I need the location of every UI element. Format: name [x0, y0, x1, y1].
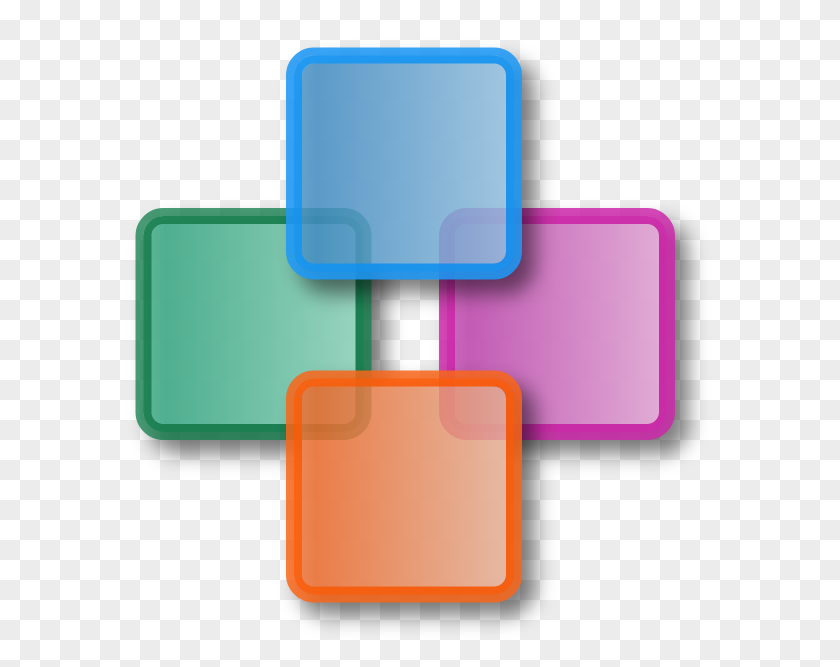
soft patches that mute the checkerboard beneath the translucent fills: [152, 64, 659, 586]
panel: magenta square: [443, 212, 688, 454]
panel: green square: [140, 212, 385, 454]
panel: orange square: [290, 374, 535, 616]
panel: blue square: [290, 52, 535, 294]
